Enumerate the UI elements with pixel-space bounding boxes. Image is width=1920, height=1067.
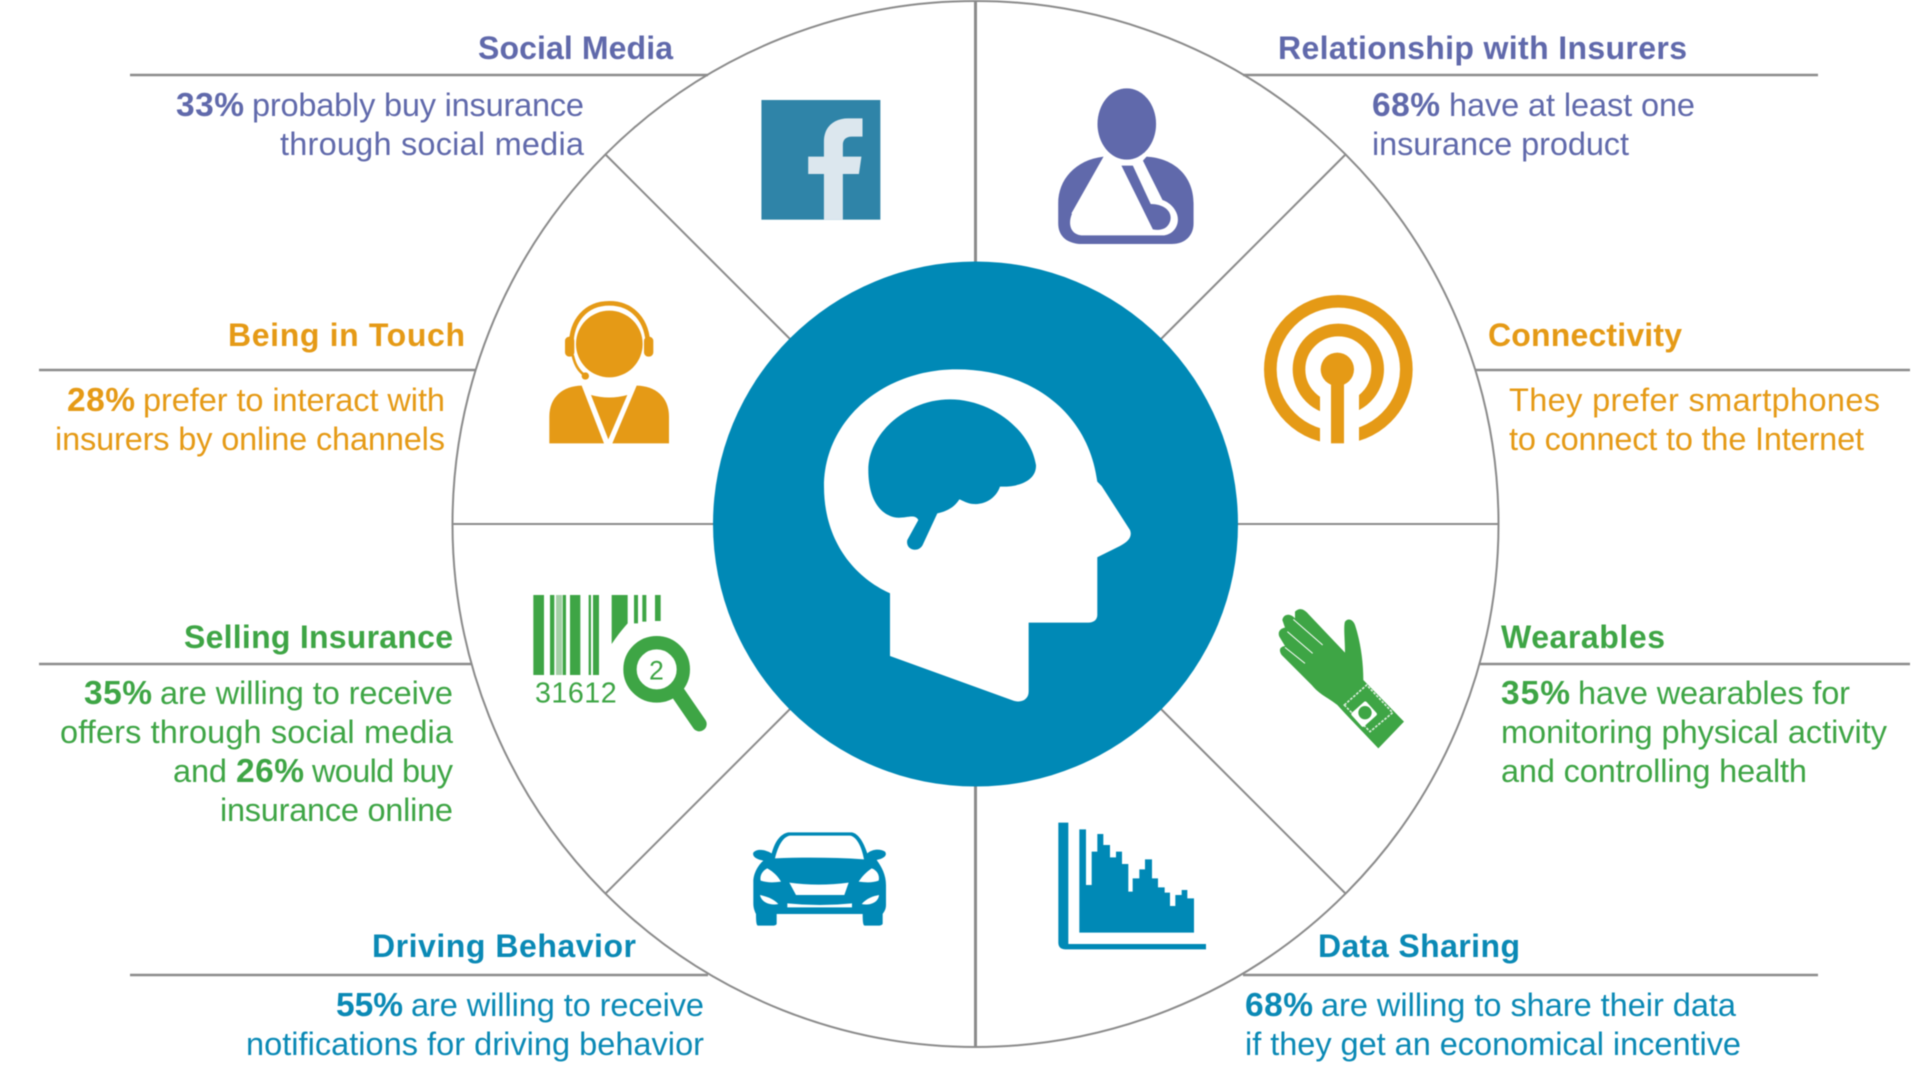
panel: social media <box>176 30 673 162</box>
text: wearables stat: have wearables for <box>1578 675 1850 711</box>
text: driving stat: are willing to receive <box>411 987 704 1023</box>
icon: barcode with magnifier <box>533 595 699 724</box>
text: selling stat: offers through social media <box>60 714 454 750</box>
panel: being in touch <box>55 317 465 457</box>
text: data sharing stat: if they get an economical incentive <box>1245 1026 1741 1062</box>
icon: headset agent <box>549 303 669 443</box>
text: wearables stat: and controlling health <box>1501 753 1807 789</box>
heading: relationship with insurers: Relationship with Insurers <box>1278 30 1687 66</box>
icon: car front <box>753 832 886 926</box>
text: driving stat <box>246 987 704 1062</box>
heading: connectivity: Connectivity <box>1488 317 1682 353</box>
panel: relationship with insurers <box>1278 30 1695 162</box>
text: wearables stat: 35% <box>1501 675 1570 712</box>
icon: area chart <box>1058 823 1206 949</box>
panel: driving behavior <box>246 928 704 1062</box>
text: selling stat: are willing to receive <box>160 675 453 711</box>
text: selling stat <box>60 675 454 828</box>
heading: data sharing: Data Sharing <box>1318 928 1520 964</box>
text: being in touch stat: prefer to interact with <box>143 382 445 418</box>
text: relationship stat <box>1372 87 1695 162</box>
text: data sharing stat <box>1245 987 1741 1062</box>
text: wearables stat <box>1501 675 1888 789</box>
text: wearables stat: monitoring physical activity <box>1501 714 1888 750</box>
text: connectivity note: They prefer smartphones <box>1509 382 1880 418</box>
text: social media stat: probably buy insurance <box>252 87 584 123</box>
heading: selling insurance: Selling Insurance <box>184 619 453 655</box>
central circle <box>713 262 1238 786</box>
text: social media stat: 33% <box>176 87 244 124</box>
icon: head with brain <box>824 369 1131 701</box>
heading: driving behavior: Driving Behavior <box>372 928 636 964</box>
text: connectivity note: to connect to the Internet <box>1509 421 1864 457</box>
icon: facebook <box>761 100 880 220</box>
text: selling stat: 35% <box>84 675 152 712</box>
text: driving stat: notifications for driving behavior <box>246 1026 704 1062</box>
text: selling stat: 26% <box>236 753 304 790</box>
text: being in touch stat <box>55 382 445 457</box>
text: relationship stat: insurance product <box>1372 126 1629 162</box>
text: social media stat <box>176 87 585 162</box>
text: social media stat: through social media <box>280 126 585 162</box>
panel: data sharing <box>1245 928 1741 1062</box>
heading: social media: Social Media <box>478 30 673 66</box>
text: data sharing stat: 68% <box>1245 987 1313 1024</box>
text: being in touch stat: insurers by online channels <box>55 421 445 457</box>
icon: hand with wearable band <box>1279 609 1404 748</box>
icon: barcode with magnifier: 31612 <box>535 677 617 709</box>
panel: wearables <box>1501 619 1888 789</box>
text: connectivity note <box>1509 382 1880 457</box>
panel: connectivity <box>1488 317 1880 457</box>
text: relationship stat: 68% <box>1372 87 1440 124</box>
text: driving stat: 55% <box>336 987 403 1024</box>
icon: person with arm sling <box>1058 88 1194 244</box>
heading: wearables: Wearables <box>1501 619 1665 655</box>
heading: being in touch: Being in Touch <box>228 317 465 353</box>
text: selling stat: and <box>173 753 227 789</box>
icon: signal broadcast <box>1270 301 1406 445</box>
text: selling stat: would buy <box>311 753 454 789</box>
icon: barcode with magnifier: 2 <box>649 655 664 685</box>
text: data sharing stat: are willing to share their data <box>1321 987 1737 1023</box>
text: being in touch stat: 28% <box>67 382 135 419</box>
text: selling stat: insurance online <box>220 792 453 828</box>
text: relationship stat: have at least one <box>1449 87 1695 123</box>
panel: selling insurance <box>60 619 454 828</box>
